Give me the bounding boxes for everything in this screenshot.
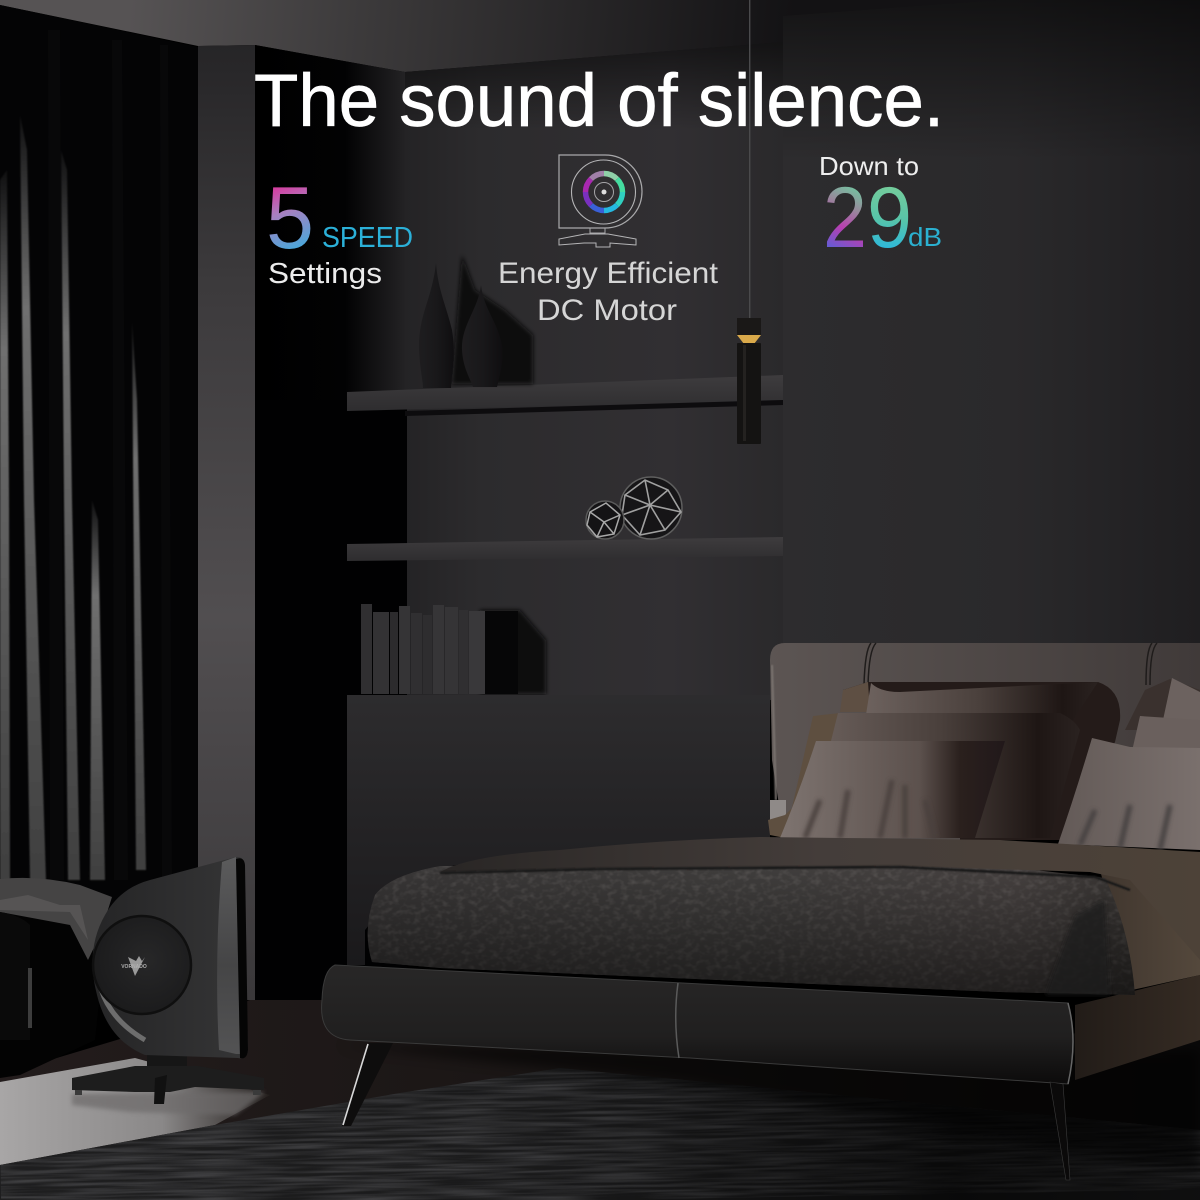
alcove lower column [255,400,407,1000]
Down to label: Down to [819,151,919,181]
title: The sound of silence. [254,59,944,142]
29 numeral [823,170,912,266]
feature: DC motor [498,155,719,327]
icon: fan outline with color ring [559,155,642,247]
vase shadow [452,255,533,384]
stand base [72,1054,264,1104]
mattress side [1100,870,1200,990]
back wall top shade [405,42,783,130]
pillar [198,45,255,1000]
leg highlight [343,1044,368,1125]
fan housing [92,857,248,1058]
front right leg [1050,1082,1070,1180]
big 5 numeral: 5 [266,168,314,267]
back pillow flanges [843,682,1120,840]
front left leg [342,1043,393,1126]
rear bezel strip [217,857,240,1054]
label: Energy Efficient DC Motor: DC Motor [537,294,677,327]
mattress textured cover [368,866,1135,995]
dB unit: dB [908,222,942,252]
duvet hem shadow [440,867,1130,890]
right wall top shade [783,0,1200,160]
grille [93,916,191,1014]
speaker floor reflection [72,1092,265,1115]
dark alcove [255,45,405,400]
right back pillows [1125,679,1200,730]
middle pillow [800,713,1080,838]
color ring [586,174,622,210]
rug [0,1045,1200,1200]
rear black edge [236,858,248,1058]
bed [322,643,1200,1180]
feature: 5 speed settings [266,168,413,290]
cabinet block [347,695,770,965]
right wall [783,0,1200,660]
shadow below bed [340,1045,1200,1170]
feature: down to 29 dB [819,151,942,266]
top shelf [347,375,783,416]
front rail [322,965,1073,1084]
bench with blanket [0,878,112,1078]
reflective lit floor [0,1058,270,1165]
label: Energy Efficient DC Motor: Energy Efficient [498,257,719,290]
label: Energy Efficient DC Motor [498,257,719,327]
side rail [1075,975,1200,1080]
duvet fold [440,837,1200,960]
short vase [462,285,503,387]
front pillow [780,741,1005,838]
pendant lamp [737,0,761,444]
shelves with decor [347,255,783,965]
Settings label: Settings [268,258,382,290]
curtain [0,5,198,908]
SPEED label: SPEED [322,222,413,254]
pillows [768,678,1200,850]
ceiling [0,0,1000,72]
29 numeral: 9 [867,170,912,266]
logo mark [121,956,147,976]
29 numeral: 2 [823,170,867,266]
curved trim arc [97,952,145,1040]
speaker: Vornado fan [72,857,264,1104]
back pillow [862,682,1098,740]
middle shelf [347,537,783,561]
floor [0,1000,1200,1200]
back wall niche [405,42,783,700]
logo mark: VORNADO [121,964,147,970]
tall vase [419,263,454,388]
headboard [770,643,1200,840]
wire spheres [586,477,682,539]
books [361,604,546,694]
